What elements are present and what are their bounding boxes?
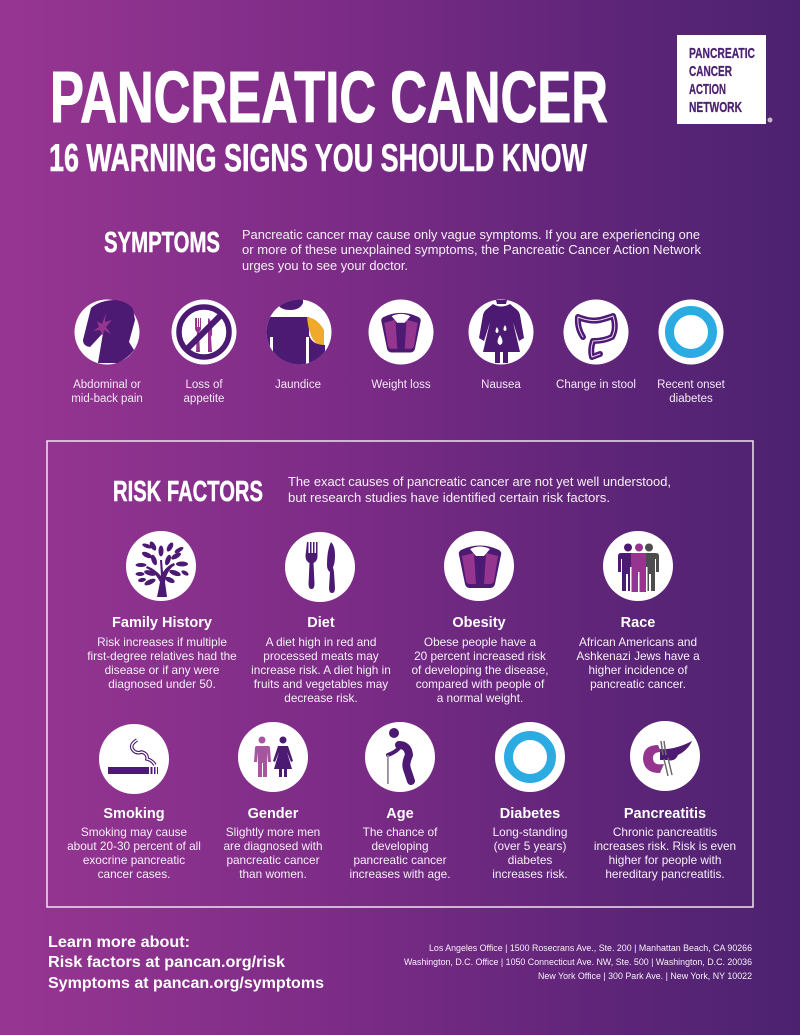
risk row one text: compared with people of [416,677,545,691]
symptoms intro text: or more of these unexplained symptoms, the Pancreatic Cancer Action Network [242,243,702,257]
risk row two text: The chance of [363,825,438,839]
symptoms intro text: Pancreatic cancer may cause only vague symptoms. If you are experiencing one [242,228,700,242]
risk row two text: diabetes [508,853,552,867]
risk row two text: Smoking [103,806,165,822]
icon: family history tree [126,531,196,601]
learn more links: Risk factors at pancan.org/risk [48,954,285,971]
icon: diabetes [495,722,565,792]
risk row one text: a normal weight. [437,691,523,705]
risk row one text: Obesity [452,615,506,631]
risk row one text: of developing the disease, [411,663,549,677]
icon: obesity scale [444,531,514,601]
risk row two text: about 20-30 percent of all [67,839,201,853]
risk row two text: developing [371,839,429,853]
symptom labels: Abdominal or [73,379,141,391]
icon: weight loss [368,300,434,364]
logo: PANCREATIC [689,45,755,62]
risk row one text: fruits and vegetables may [254,677,388,691]
icon: nausea [468,300,534,364]
risk row two text: than women. [239,867,307,881]
risk row two text: increases risk. Risk is even [594,839,736,853]
office addresses [404,943,752,981]
risk row two text: cancer cases. [98,867,170,881]
symptom labels [71,379,726,405]
risk row one text: disease or if any were [105,663,220,677]
risk row one text: pancreatic cancer. [590,677,686,691]
symptom labels: Recent onset [657,379,726,391]
risk row two text: Smoking may cause [81,825,188,839]
office addresses: Los Angeles Office | 1500 Rosecrans Ave., Ste. 200 | Manhattan Beach, CA 90266 [429,943,752,953]
risk row two text: Slightly more men [226,825,320,839]
symptoms intro text: urges you to see your doctor. [242,259,408,273]
logo: NETWORK [689,99,742,116]
risk row one text: Ashkenazi Jews have a [576,649,700,663]
symptom labels: mid-back pain [71,393,143,405]
icon: loss of appetite [172,300,236,364]
icon: race three people [603,531,673,601]
risk row one text: Risk increases if multiple [97,635,227,649]
symptom labels: Nausea [481,379,521,391]
logo: CANCER [689,63,732,80]
logo: ACTION [689,81,726,98]
risk row two text: Age [386,806,414,822]
icon: abdominal pain [74,300,140,364]
office addresses: Washington, D.C. Office | 1050 Connecticut Ave. NW, Ste. 500 | Washington, D.C. 20036 [404,957,752,967]
symptom labels: appetite [184,393,224,405]
symptom labels: diabetes [669,393,713,405]
risk row two text: pancreatic cancer [226,853,320,867]
risk row one text: Obese people have a [424,635,537,649]
risk row two text: Gender [248,806,299,822]
office addresses: New York Office | 300 Park Ave. | New York, NY 10022 [538,971,752,981]
symptoms heading: SYMPTOMS [104,227,220,259]
risk row two text: pancreatic cancer [353,853,447,867]
risk factors intro: but research studies have identified certain risk factors. [288,491,610,505]
icon: pancreatitis [630,721,700,791]
risk row one text: processed meats may [263,649,379,663]
risk row one text [87,615,700,705]
icon: diet fork and knife [285,532,355,602]
risk row one text: increase risk. A diet high in [251,663,391,677]
risk row one text: higher incidence of [588,663,688,677]
risk row one text: diagnosed under 50. [108,677,216,691]
symptom labels: Loss of [185,379,223,391]
panel: risk factors [47,441,753,907]
risk row two text: are diagnosed with [223,839,323,853]
risk row one text: African Americans and [579,635,697,649]
risk row one text: decrease risk. [284,691,358,705]
risk row one text: Diet [307,615,335,631]
risk row two text: increases risk. [492,867,568,881]
learn more links: Learn more about: [48,934,190,951]
risk factors heading: RISK FACTORS [113,476,263,508]
risk row one text: Race [621,615,655,631]
risk row two text: Diabetes [500,806,560,822]
risk row one text: A diet high in red and [266,635,376,649]
learn more links: Symptoms at pancan.org/symptoms [48,975,324,992]
risk factors intro: The exact causes of pancreatic cancer are not yet well understood, [288,475,671,489]
risk row one text: first-degree relatives had the [87,649,237,663]
icon: change in stool [564,300,628,364]
risk row two text: Pancreatitis [624,806,706,822]
risk row one text: Family History [112,615,212,631]
risk row two text: exocrine pancreatic [83,853,185,867]
symptom labels: Jaundice [275,379,321,391]
icon: gender [238,722,308,792]
risk row one text: 20 percent increased risk [414,649,546,663]
symptom labels: Change in stool [556,379,636,391]
learn more links [48,934,324,992]
risk row two text: Chronic pancreatitis [613,825,717,839]
risk row two text: increases with age. [350,867,450,881]
risk row two text: (over 5 years) [494,839,566,853]
risk row two text: higher for people with [609,853,721,867]
risk row two text: hereditary pancreatitis. [605,867,725,881]
risk row two text [67,806,736,881]
symptom labels: Weight loss [371,379,431,391]
icon: jaundice [266,300,332,364]
symptoms intro text [242,228,702,273]
risk row two text: Long-standing [493,825,567,839]
logo [677,35,772,124]
icon: recent onset diabetes [658,300,724,364]
risk factors intro [288,475,671,505]
icon: age [365,722,435,792]
icon: smoking [99,724,169,794]
